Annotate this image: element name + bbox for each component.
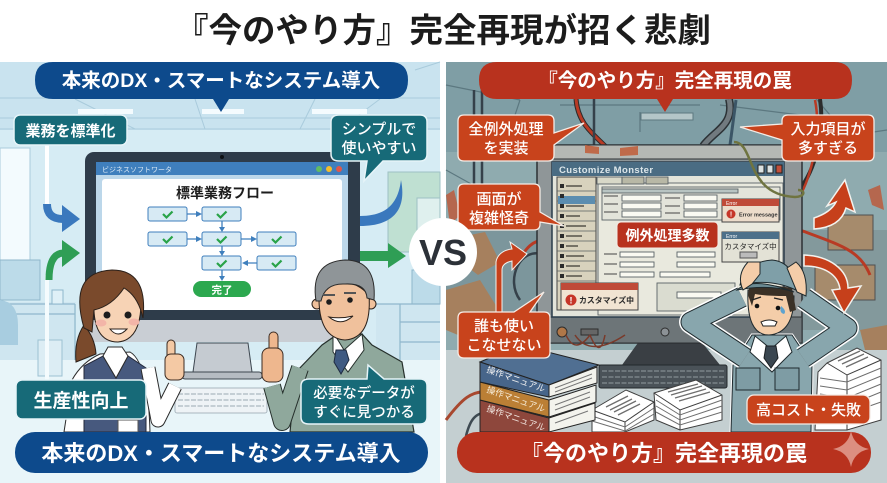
callout: all exceptions: 全例外処理 — [468, 121, 544, 138]
callout: find data fast: 必要なデータが — [313, 384, 415, 402]
customize monster window — [552, 162, 784, 317]
callout: all exceptions — [458, 115, 584, 161]
banner: top trap: 『今のやり方』完全再現の罠 — [538, 69, 792, 92]
callout: nobody can use — [458, 292, 550, 358]
callout: nobody can use: 誰も使い — [474, 318, 534, 335]
form fields — [597, 177, 783, 315]
warning dialog: customizing: カスタマイズ中 — [579, 295, 634, 305]
workflow diagram: 完了 — [212, 284, 232, 296]
callout: too many inputs: 多すぎる — [798, 139, 858, 157]
callout: simple and easy: シンプルで — [342, 121, 416, 138]
error dialog: customizing — [722, 232, 779, 262]
callout: find data fast: すぐに見つかる — [313, 404, 415, 421]
banner: bottom trap: 『今のやり方』完全再現の罠 — [521, 441, 807, 466]
workflow diagram — [148, 207, 296, 297]
callout: find data fast — [301, 365, 427, 424]
error dialog: message — [722, 199, 779, 222]
person: woman with thumbs up — [64, 270, 184, 432]
callout: productivity — [16, 380, 146, 419]
error dialog: customizing: カスタマイズ中 — [724, 241, 777, 251]
callout: all exceptions: を実装 — [483, 140, 529, 157]
sidebar menu — [557, 177, 596, 310]
monitor — [85, 152, 360, 379]
stack of operation manuals: 操作マニュアル — [485, 402, 547, 433]
banner: bottom smart DX — [15, 432, 428, 473]
callout: complex screen: 複雑怪奇 — [469, 210, 529, 227]
banner: top smart DX: 本来のDX・スマートなシステム導入 — [62, 69, 380, 92]
arrow: falling red — [804, 255, 861, 313]
software window — [96, 162, 348, 310]
banner: top trap — [479, 62, 852, 112]
callout: high cost failure — [747, 395, 870, 424]
VS badge: VS — [419, 232, 467, 273]
hanging cables — [474, 90, 870, 300]
banner: top smart DX — [35, 62, 408, 112]
broken monitor — [537, 145, 802, 365]
arrow: blue standardise — [47, 145, 80, 232]
banner: bottom smart DX: 本来のDX・スマートなシステム導入 — [41, 441, 401, 466]
title: 『今のやり方』完全再現が招く悲劇 — [175, 12, 711, 50]
error dialog: message: Error — [726, 201, 737, 207]
callout: many exceptions: 例外処理多数 — [626, 228, 710, 244]
arrow: blue simple — [360, 180, 402, 226]
callout: complex screen — [458, 184, 564, 230]
icon: sparkle — [833, 431, 869, 467]
paper stacks — [592, 348, 881, 432]
keyboard — [175, 388, 267, 413]
callout: complex screen: 画面が — [476, 190, 522, 208]
VS badge — [409, 218, 477, 286]
panel: smart DX system — [0, 62, 440, 483]
callout: high cost failure: 高コスト・失敗 — [756, 402, 861, 419]
warning dialog: customizing: ! — [570, 296, 572, 306]
error dialog: customizing: Error — [726, 234, 737, 240]
arrow: green to comparison — [360, 243, 406, 268]
callout: standardise work — [14, 115, 127, 145]
callout: simple and easy: 使いやすい — [341, 140, 417, 157]
person: worried worker — [691, 0, 848, 432]
arrow: small red rising — [496, 242, 527, 312]
customize monster window: Customize Monster — [559, 165, 653, 176]
arrow: green productivity — [47, 240, 80, 380]
stack of operation manuals: 操作マニュアル — [485, 363, 547, 394]
banner: bottom trap — [457, 432, 871, 473]
callout: too many inputs — [740, 115, 874, 161]
panel: current-way reproduction trap — [446, 0, 887, 483]
callout: too many inputs: 入力項目が — [790, 120, 866, 138]
stack of operation manuals: 操作マニュアル — [485, 383, 547, 414]
callout: simple and easy — [331, 115, 427, 181]
callout: many exceptions — [617, 222, 718, 248]
callout: productivity: 生産性向上 — [33, 390, 129, 412]
software window: ビジネスソフトワータ — [102, 165, 172, 174]
person: older man with thumbs up — [262, 260, 414, 432]
right messy background — [446, 62, 887, 483]
dark keyboard — [599, 365, 727, 388]
callout: standardise work: 業務を標準化 — [25, 122, 116, 140]
stray green cable — [734, 142, 803, 197]
flow heading: 標準業務フロー — [176, 185, 274, 201]
stack of operation manuals — [480, 345, 599, 433]
arrow: rising red — [814, 180, 855, 229]
callout: nobody can use: こなせない — [466, 337, 542, 354]
left office background — [0, 62, 440, 483]
warning dialog: customizing — [561, 283, 638, 310]
error dialog: message: Error message — [739, 212, 778, 218]
error dialog: message: ! — [730, 212, 732, 218]
